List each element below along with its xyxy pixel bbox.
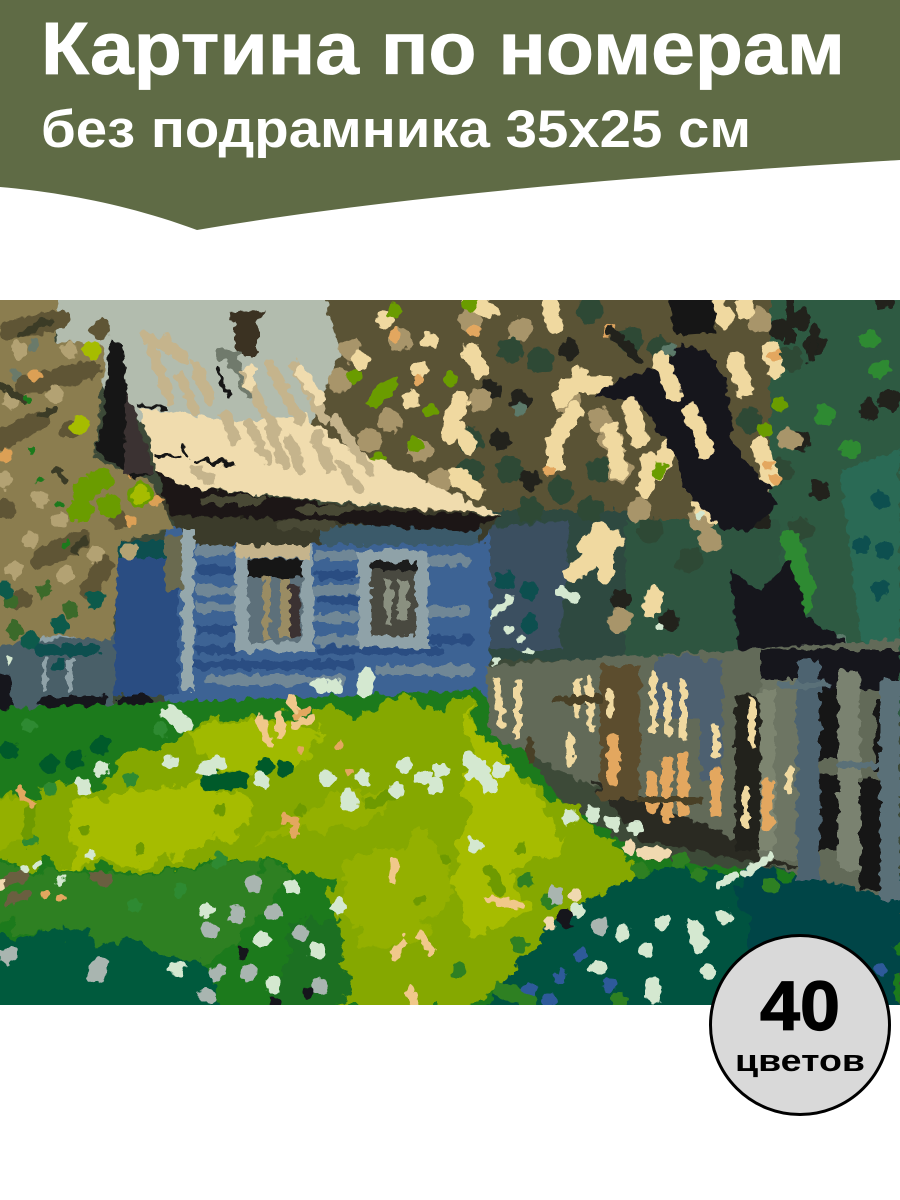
- left tree foliage: [0, 285, 175, 650]
- chimney: [220, 310, 265, 395]
- garden grass: [0, 690, 900, 1020]
- badge caption: цветов: [735, 1043, 865, 1078]
- header banner: [0, 0, 900, 230]
- tree trunk and branches: [594, 300, 846, 652]
- left porch and door: [0, 530, 194, 710]
- subtitle: без подрамника 35х25 см: [41, 100, 751, 159]
- badge: 40 colours: [710, 936, 890, 1114]
- painting: cottage in a blooming garden: [0, 285, 900, 1020]
- house wall: [150, 490, 500, 710]
- badge number: 40: [760, 967, 840, 1045]
- white flowers: [0, 650, 770, 1003]
- sky: [56, 300, 342, 424]
- windows: [235, 545, 428, 652]
- title: Картина по номерам: [41, 7, 845, 90]
- fence: [485, 640, 900, 900]
- roof: [97, 335, 500, 532]
- right tree foliage: [310, 285, 900, 720]
